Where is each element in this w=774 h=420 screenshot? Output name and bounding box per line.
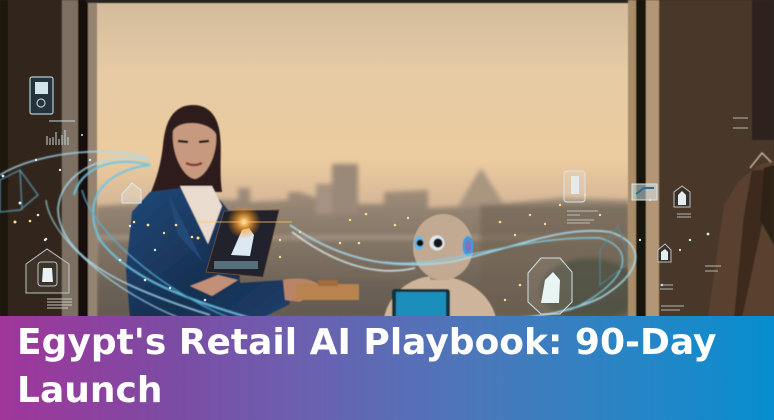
face (173, 123, 216, 179)
robot (384, 214, 496, 318)
title banner (0, 316, 774, 420)
holographic bottle card (564, 171, 585, 202)
hair (151, 105, 222, 192)
holographic data lines (567, 118, 748, 310)
holographic chart bars (47, 121, 75, 145)
holographic small sale card (632, 184, 657, 200)
holographic tag near woman (122, 183, 141, 203)
hands (190, 275, 238, 296)
woman (126, 105, 320, 318)
blurred city skyline with pyramid (96, 164, 640, 322)
title: Egypt's Retail AI Playbook: 90-Day Launch (17, 322, 716, 410)
holographic text lines bottom left (47, 299, 72, 308)
left wall and window frame (0, 0, 630, 318)
parcel boxes (296, 280, 359, 300)
right wall and window frame (628, 0, 774, 318)
holographic large price tag (528, 258, 572, 314)
blazer (126, 188, 290, 318)
holographic tag right upper (674, 186, 690, 207)
jacket on hanger (708, 153, 774, 318)
holographic network swirl (0, 152, 635, 318)
holographic tag right lower (658, 244, 671, 262)
holographic icon: app panel (30, 77, 53, 114)
glowing particles (14, 194, 601, 301)
tablet with price tag (198, 205, 292, 277)
holographic icon: house tag left (26, 249, 69, 293)
